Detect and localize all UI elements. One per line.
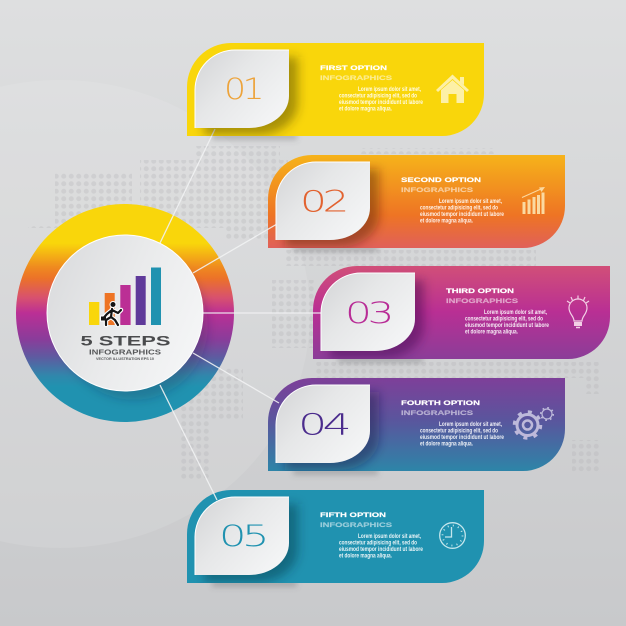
body text: Lorem ipsum dolor sit amet, (484, 310, 547, 316)
panel: third option background (313, 266, 610, 359)
bar chart logo (89, 268, 161, 325)
heading: THIRD OPTION (446, 288, 514, 295)
body text (420, 199, 505, 224)
panel: second option background (268, 155, 565, 248)
circle: gradient ring (16, 204, 234, 422)
body text: Lorem ipsum dolor sit amet, (358, 87, 421, 93)
step 4 (276, 385, 553, 470)
icon: running businessman (100, 301, 121, 325)
leaf card 04 (276, 385, 370, 463)
heading: SECOND OPTION (401, 177, 481, 184)
body text: Lorem ipsum dolor sit amet, (358, 534, 421, 540)
body text: consectetur adipisicing elit, sed do (339, 540, 417, 546)
subheading: INFOGRAPHICS (401, 410, 474, 417)
body text (465, 310, 550, 336)
body text: eiusmod tempor incididunt ut labore (465, 323, 550, 329)
step 1 (195, 50, 469, 135)
body text: et dolore magna aliqua. (420, 218, 473, 224)
icon: gears (514, 408, 553, 438)
body text: eiusmod tempor incididunt ut labore (420, 212, 505, 218)
heading: FIFTH OPTION (320, 512, 386, 519)
heading: FOURTH OPTION (401, 400, 480, 407)
body text (339, 87, 424, 112)
leaf card 05 (195, 497, 289, 575)
step 3 (321, 273, 589, 358)
leaf card 01 (195, 50, 289, 128)
body text: eiusmod tempor incididunt ut labore (420, 435, 505, 441)
step 5 (195, 497, 465, 582)
number 03: 03 (345, 296, 391, 330)
body text: consectetur adipisicing elit, sed do (420, 428, 498, 434)
center circle with logo (47, 235, 203, 391)
body text: Lorem ipsum dolor sit amet, (439, 199, 502, 205)
icon: house (436, 74, 469, 103)
icon: clock (440, 523, 465, 548)
connector lines (160, 129, 322, 500)
body text: et dolore magna aliqua. (339, 106, 392, 112)
body text (339, 534, 424, 560)
caption: VECTOR ILLUSTRATION EPS 10 (96, 357, 154, 361)
title: 5 steps: 5 STEPS (80, 332, 170, 348)
number 04: 04 (298, 408, 349, 442)
body text: et dolore magna aliqua. (465, 330, 518, 336)
leaf card 03 (321, 273, 415, 351)
panel shadows on background (212, 133, 423, 587)
subheading: INFOGRAPHICS (320, 75, 393, 82)
panel: fourth option background (268, 378, 565, 471)
icon: growth chart (522, 187, 545, 214)
number 02: 02 (300, 184, 346, 218)
number 05: 05 (219, 519, 266, 553)
dotted world map (28, 146, 600, 480)
body text: consectetur adipisicing elit, sed do (339, 94, 417, 100)
panel: fifth option background (187, 490, 484, 583)
body text: consectetur adipisicing elit, sed do (420, 206, 498, 212)
panel: first option background (187, 43, 484, 136)
body text: et dolore magna aliqua. (339, 554, 392, 560)
icon: light bulb (567, 296, 589, 328)
body text: consectetur adipisicing elit, sed do (465, 316, 543, 322)
body text: Lorem ipsum dolor sit amet, (439, 422, 502, 428)
subtitle: infographics: INFOGRAPHICS (89, 348, 161, 356)
leaf card 02 (276, 162, 370, 240)
number 01: 01 (224, 72, 262, 106)
subheading: INFOGRAPHICS (401, 187, 474, 194)
body text (420, 422, 505, 448)
subheading: INFOGRAPHICS (446, 298, 519, 305)
body text: eiusmod tempor incididunt ut labore (339, 547, 424, 553)
step 2 (276, 162, 545, 247)
background light ellipse (0, 80, 310, 548)
body text: eiusmod tempor incididunt ut labore (339, 100, 424, 106)
body text: et dolore magna aliqua. (420, 442, 473, 448)
center disc (47, 235, 203, 391)
subheading: INFOGRAPHICS (320, 522, 393, 529)
heading: FIRST OPTION (320, 65, 387, 72)
